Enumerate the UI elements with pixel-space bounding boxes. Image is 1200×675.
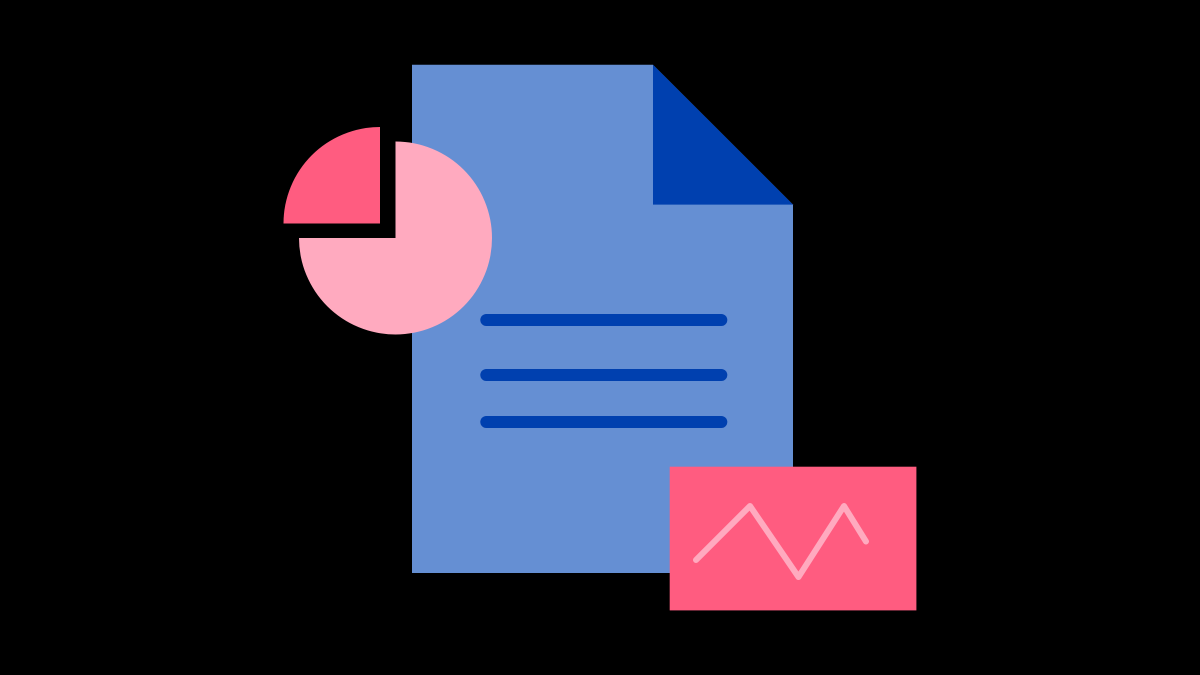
large pie segment	[299, 142, 492, 334]
line chart card	[670, 467, 916, 610]
icon: folded corner	[653, 65, 793, 205]
text lines	[480, 314, 727, 428]
line chart trend	[696, 506, 866, 577]
pie chart	[284, 127, 492, 334]
panel: document page	[412, 65, 793, 573]
small pie segment	[284, 127, 380, 224]
